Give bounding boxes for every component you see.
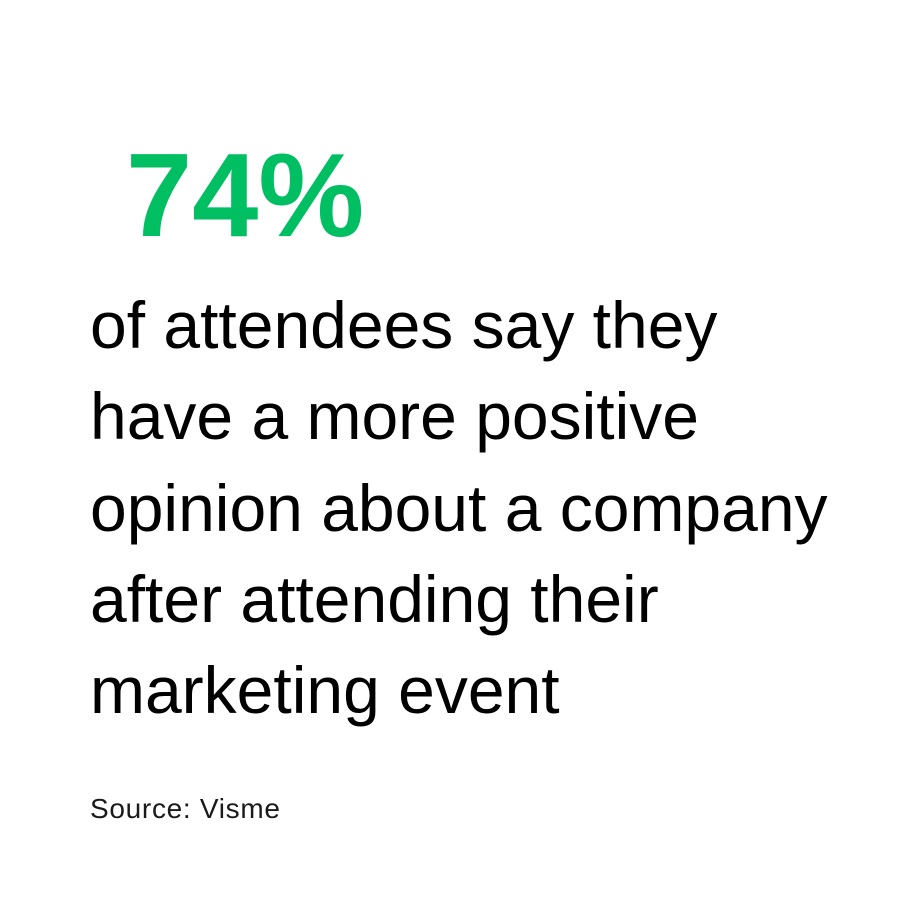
text block: description	[90, 288, 828, 727]
text block: description: marketing event	[90, 653, 560, 727]
text block: description: have a more positive	[90, 379, 699, 453]
text block: description: of attendees say they	[90, 288, 717, 362]
source note: Source: Visme	[90, 793, 281, 824]
text block: description: after attending their	[90, 562, 659, 636]
text block: description: opinion about a company	[90, 470, 828, 544]
statistic: 74%: 74%	[126, 128, 364, 262]
